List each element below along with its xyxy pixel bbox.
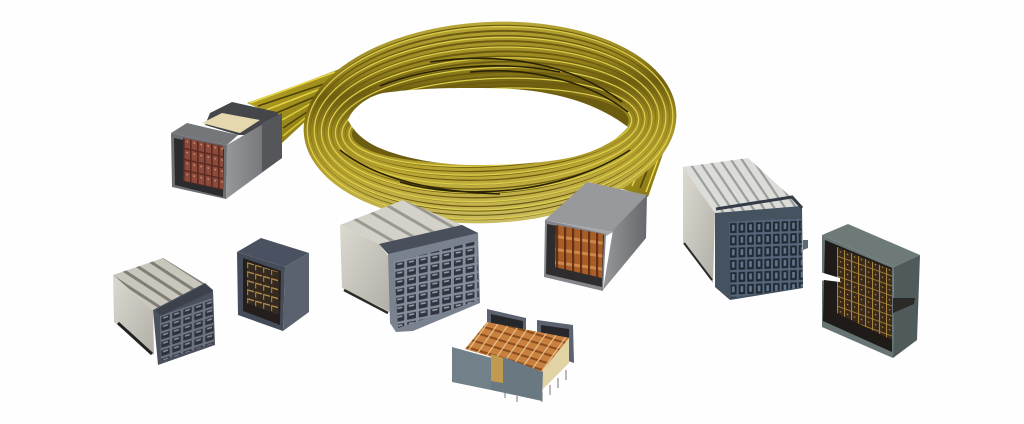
dark streaks in coil	[340, 58, 630, 194]
left cable fan	[247, 68, 342, 143]
pins	[505, 370, 566, 402]
rear walls	[487, 309, 526, 345]
contact grid	[183, 138, 223, 190]
connector: large shielded centre	[340, 200, 480, 332]
connector: cable end right	[544, 182, 647, 291]
cable coil	[299, 13, 681, 232]
cell grid	[729, 218, 803, 298]
front walls	[452, 347, 492, 390]
right cable fan	[606, 122, 674, 197]
contact grid	[247, 262, 279, 315]
connector: small silver shielded	[113, 258, 215, 365]
connector: open header right	[820, 224, 920, 358]
copper contacts	[465, 322, 570, 372]
cell grid	[160, 298, 214, 361]
connector: cable end left	[171, 102, 282, 199]
connector: large shielded right	[683, 158, 808, 300]
cell grid	[394, 241, 479, 328]
notches	[820, 272, 840, 282]
contact grid	[555, 225, 603, 278]
connector: dark header box	[237, 238, 309, 331]
contact grid	[837, 247, 892, 340]
connector: low-profile header bottom	[452, 309, 574, 402]
coil centre opening	[348, 88, 628, 165]
